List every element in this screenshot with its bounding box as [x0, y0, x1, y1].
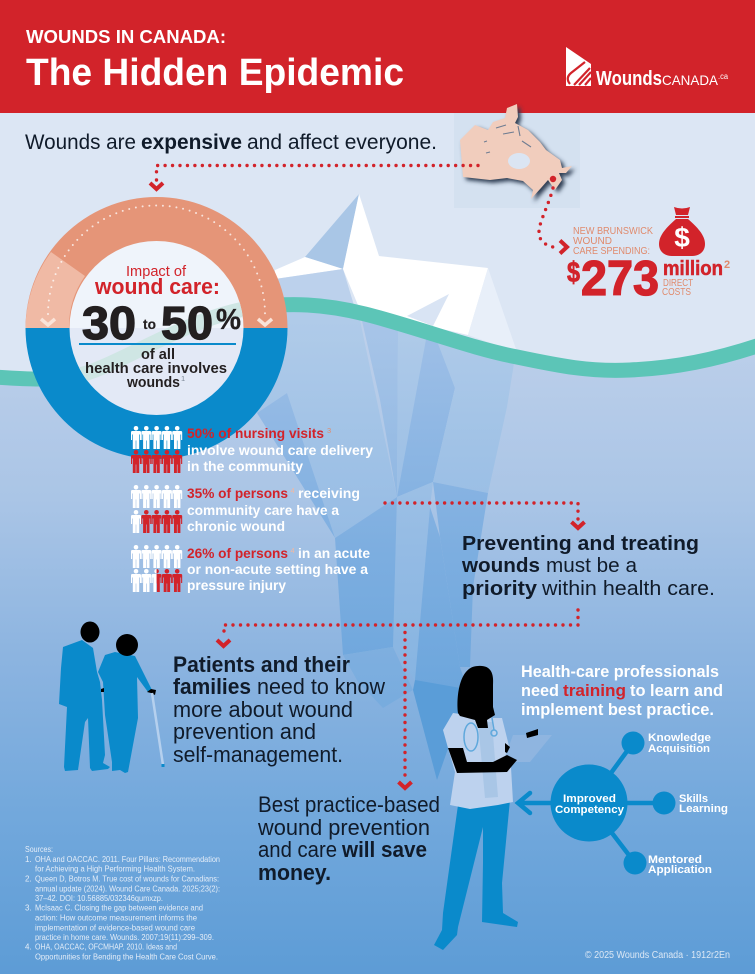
- description: [85, 347, 227, 391]
- priority statement: within health care.: [541, 577, 715, 600]
- hub label: Improved: [563, 793, 616, 805]
- percentage figure: 30: [82, 297, 136, 349]
- label: CARE SPENDING:: [573, 245, 650, 257]
- text: [187, 426, 373, 474]
- footnote 2: 2: [724, 259, 730, 271]
- savings statement: [257, 792, 440, 885]
- stethoscope: [464, 718, 497, 751]
- sources: implementation of evidence-based wound care: [35, 924, 196, 932]
- patients statement: more about wound: [173, 697, 353, 722]
- logo: Wounds Canada: .ca: [718, 72, 729, 81]
- direct costs: DIRECT: [663, 277, 693, 289]
- text: chronic wound: [187, 519, 285, 534]
- sources: 37–42. DOI: 10.56885/032346qumxzp.: [35, 894, 163, 903]
- label: WOUND: [573, 235, 612, 247]
- illustration: older couple: [59, 622, 164, 773]
- description: health care involves: [85, 361, 227, 377]
- satellite labels: [648, 732, 728, 876]
- competency diagram: [518, 732, 728, 876]
- sources: practice in home care. Wounds. 2007;19(11):299–309.: [35, 933, 214, 942]
- tunic: [443, 713, 513, 809]
- satellite labels: Skills: [679, 793, 708, 805]
- text: [187, 546, 370, 593]
- header band: [0, 0, 755, 113]
- sources: [25, 845, 220, 962]
- patients statement: Patients and their: [173, 652, 350, 677]
- woman: [98, 652, 152, 773]
- text: [187, 486, 360, 534]
- ring: lighter wedge: [26, 252, 85, 328]
- satellite labels: Acquisition: [648, 743, 710, 755]
- priority statement: wounds: [461, 554, 540, 577]
- ring: upper salmon: [26, 197, 288, 328]
- chevron right: [258, 319, 272, 325]
- cane tip: [162, 764, 164, 767]
- woman head: [116, 634, 138, 656]
- training statement: implement best practice.: [521, 701, 714, 719]
- chevron left: [41, 319, 55, 325]
- savings statement: wound prevention: [257, 815, 430, 840]
- illustration: nurse: [434, 666, 552, 950]
- priority statement: must be a: [546, 554, 638, 577]
- direct costs: [662, 277, 693, 298]
- patients statement: need to know: [257, 674, 386, 699]
- satellite labels: Learning: [679, 803, 728, 815]
- patients statement: self-management.: [173, 742, 343, 767]
- people icons: [131, 545, 182, 592]
- map of Canada: [454, 104, 580, 208]
- stat: pressure injury: [131, 545, 370, 593]
- iceberg above water: [275, 194, 517, 352]
- figure: 273: [581, 252, 659, 306]
- impact label: Impact of: [126, 264, 187, 280]
- connectors: [589, 743, 664, 863]
- direct costs: COSTS: [662, 286, 691, 298]
- sources: Queen D, Botros M. True cost of wounds for Canadians:: [35, 874, 219, 884]
- intro sentence: [25, 130, 437, 154]
- ring: lower blue: [26, 328, 288, 459]
- training statement: to learn and: [630, 682, 723, 700]
- savings statement: money.: [258, 860, 331, 885]
- patients statement: [173, 652, 386, 767]
- intro sentence: Wounds are: [25, 130, 136, 154]
- logo: Wounds Canada: CANADA: [662, 72, 719, 88]
- text: receiving: [298, 486, 360, 501]
- priority statement: [461, 532, 715, 600]
- hub circle: [550, 764, 628, 842]
- figure: million: [663, 258, 723, 280]
- savings statement: will save: [341, 837, 427, 862]
- icon: money bag: [659, 207, 705, 256]
- sources: Opportunities for Bending the Health Care Cost Curve.: [35, 952, 218, 962]
- description: wounds: [126, 375, 180, 391]
- inner disc: [70, 241, 244, 415]
- hub label: [555, 793, 624, 816]
- sources: OHA and OACCAC. 2011. Four Pillars: Recommendation: [35, 855, 220, 864]
- satellite labels: Application: [648, 864, 712, 876]
- training statement: training: [563, 682, 626, 700]
- training statement: need: [521, 682, 559, 700]
- stat: nursing visits: [131, 426, 373, 474]
- training statement: Health-care professionals: [521, 663, 719, 681]
- sources: annual update (2024). Wound Care Canada. 2025;23(2):: [35, 884, 220, 894]
- spending callout: [567, 207, 730, 306]
- sources: 1.: [25, 855, 32, 864]
- stat: community care: [131, 485, 360, 534]
- people icons: [131, 485, 182, 533]
- figure: [567, 252, 723, 306]
- patients statement: prevention and: [173, 719, 316, 744]
- people icons: [131, 426, 182, 473]
- satellite labels: Mentored: [648, 854, 702, 866]
- logo: Wounds Canada: Wounds: [596, 68, 662, 90]
- percentage figure: to: [143, 317, 156, 332]
- satellite: skills: [652, 792, 676, 814]
- sources: Sources:: [25, 845, 53, 854]
- hands: [101, 688, 156, 695]
- dotted connector: map to circle: [150, 166, 478, 189]
- description: of all: [141, 347, 175, 363]
- heading: title: The Hidden Epidemic: [26, 52, 404, 94]
- forearm: [505, 743, 510, 753]
- sources: for Achieving a High Performing Health System.: [35, 864, 195, 874]
- priority statement: priority: [462, 577, 538, 600]
- water: [0, 305, 755, 974]
- footnote 1: 1: [181, 374, 185, 383]
- intro sentence: expensive: [141, 130, 242, 154]
- text: 26% of persons: [187, 546, 288, 561]
- scrub top: [478, 722, 498, 798]
- trousers: [434, 800, 518, 950]
- sources: 3.: [25, 904, 32, 912]
- copyright: © 2025 Wounds Canada · 1912r2En: [585, 950, 730, 961]
- intro sentence: and affect everyone.: [247, 130, 437, 154]
- satellite: mentored: [624, 852, 646, 874]
- wound care label: wound care:: [94, 274, 220, 299]
- savings statement: and care: [258, 837, 337, 862]
- cane: [152, 693, 163, 765]
- percentage figure: [82, 297, 241, 349]
- clipboard: [503, 735, 552, 762]
- patients statement: families: [173, 674, 251, 699]
- training statement: [521, 663, 723, 719]
- text: in the community: [187, 459, 303, 474]
- sources: action: How outcome measurement informs the: [35, 914, 198, 922]
- percentage figure: 50: [161, 297, 213, 349]
- text: 35% of persons: [187, 486, 288, 501]
- priority statement: Preventing and treating: [462, 532, 699, 555]
- icon: money bag: $: [674, 222, 690, 253]
- text: community care have a: [187, 503, 339, 518]
- text: 4: [290, 546, 295, 555]
- sources: OHA, OACCAC, OFCMHAP. 2010. Ideas and: [35, 942, 177, 952]
- man head: [80, 622, 100, 642]
- percentage figure: %: [216, 304, 241, 336]
- dotted arc: [48, 205, 265, 314]
- satellite: knowledge: [622, 732, 644, 754]
- text: pressure injury: [187, 578, 286, 593]
- hair: [458, 666, 495, 728]
- arm: [448, 748, 517, 773]
- hand with pen: [526, 729, 538, 738]
- text: 3: [327, 426, 331, 435]
- blue rule: [79, 343, 236, 345]
- savings statement: Best practice-based: [258, 792, 440, 817]
- satellite labels: Knowledge: [648, 732, 711, 744]
- sources: 4.: [25, 942, 32, 952]
- man: [59, 640, 110, 771]
- label: [573, 225, 653, 257]
- arrow to nurse: [518, 793, 552, 813]
- logo: Wounds Canada: [566, 47, 729, 90]
- text: involve wound care delivery: [187, 443, 373, 458]
- sources: 2.: [25, 874, 32, 884]
- text: in an acute: [298, 546, 370, 561]
- text: or non-acute setting have a: [187, 562, 368, 577]
- iceberg below water: [250, 306, 515, 780]
- label: NEW BRUNSWICK: [573, 225, 653, 237]
- impact circle: [0, 197, 288, 459]
- text: 50% of nursing visits: [187, 426, 324, 441]
- heading: kicker: WOUNDS IN CANADA:: [26, 27, 226, 47]
- dotted connector: stats to priority: [385, 503, 584, 528]
- sources: McIsaac C. Closing the gap between evidence and: [35, 904, 203, 912]
- figure: $: [567, 257, 580, 289]
- waterline band: [0, 305, 755, 379]
- text: 4: [290, 486, 295, 495]
- dotted connector: priority to patients and savings: [217, 610, 578, 788]
- hub label: Competency: [555, 804, 624, 816]
- dotted connector: map to spending: [539, 188, 567, 254]
